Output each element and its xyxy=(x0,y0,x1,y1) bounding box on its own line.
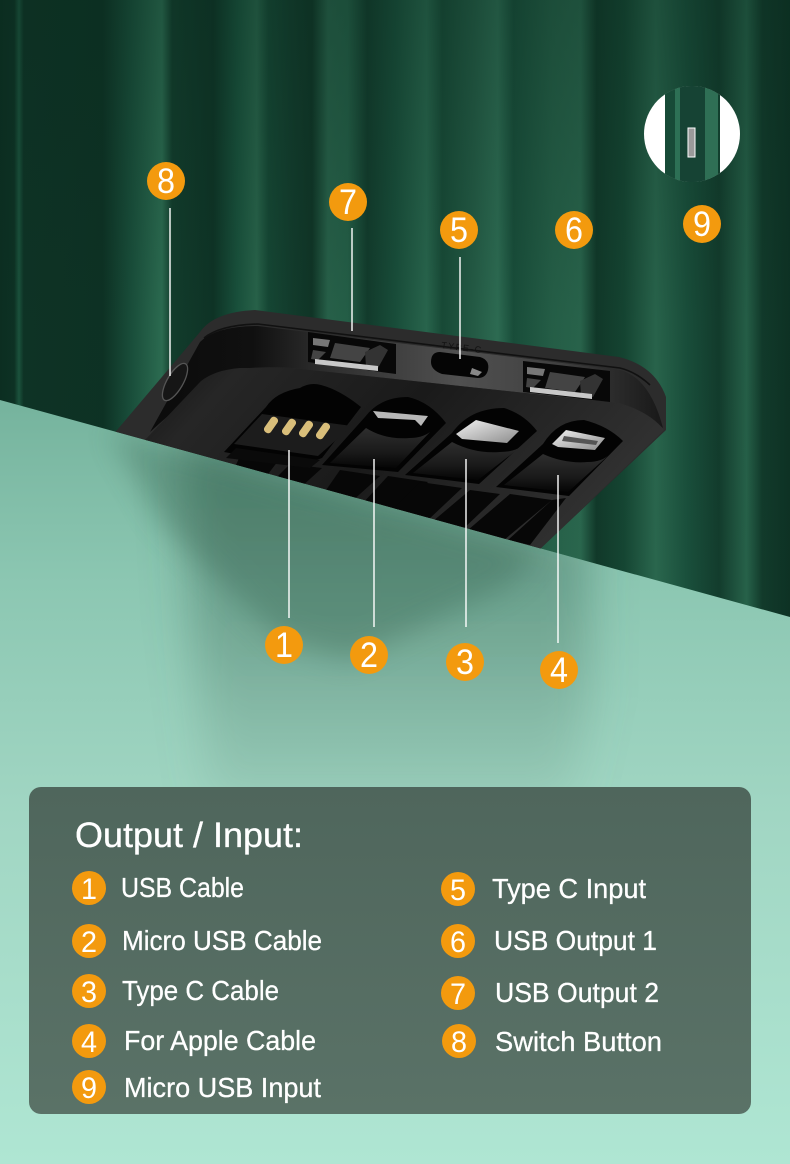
Type-C port (5) xyxy=(431,340,488,378)
port band xyxy=(150,326,663,432)
legend item 4: 4 xyxy=(81,1026,97,1059)
legend item 3 xyxy=(72,974,279,1009)
device body outline xyxy=(112,310,666,550)
badge 7 xyxy=(329,183,367,222)
legend item 2 xyxy=(72,924,322,959)
badge 3: 3 xyxy=(456,643,474,682)
legend item 8: Switch Button xyxy=(495,1026,662,1057)
badge 7: 7 xyxy=(339,183,357,222)
badge 8 xyxy=(147,162,185,201)
background: green curtain xyxy=(0,0,790,640)
slot: Micro USB cable xyxy=(322,397,446,472)
background: mint diagonal panel xyxy=(0,400,790,968)
badge 1 xyxy=(265,626,303,665)
legend item 9: Micro USB Input xyxy=(124,1072,321,1103)
switch button xyxy=(162,362,188,402)
top edge bevel xyxy=(204,324,650,385)
legend item 1 xyxy=(72,871,244,906)
legend item 7: 7 xyxy=(450,978,466,1011)
badge 5 xyxy=(440,211,478,250)
slot: Lightning cable xyxy=(496,420,623,496)
badge 4: 4 xyxy=(550,651,568,690)
badge 6 xyxy=(555,211,593,250)
legend item 7 xyxy=(441,976,659,1011)
heading: Output / Input: xyxy=(75,816,303,855)
legend item 5 xyxy=(441,872,646,907)
legend item 2: 2 xyxy=(81,926,97,959)
legend item 3: Type C Cable xyxy=(122,975,279,1006)
legend item 6: USB Output 1 xyxy=(494,925,657,956)
badge 3 xyxy=(446,643,484,682)
cable strips xyxy=(232,456,566,545)
badge 5: 5 xyxy=(450,211,468,250)
legend item 8: 8 xyxy=(451,1026,467,1059)
Type-C port (5): TYPE-C xyxy=(441,340,482,355)
power bank device xyxy=(112,310,666,550)
badge 6: 6 xyxy=(565,211,583,250)
badge 4 xyxy=(540,651,578,690)
legend item 1: 1 xyxy=(81,873,97,906)
legend item 6 xyxy=(441,924,657,959)
legend item 8 xyxy=(442,1024,662,1059)
legend item 4: For Apple Cable xyxy=(124,1025,316,1056)
USB output port 1 (6) xyxy=(523,361,610,402)
badge 9: 9 xyxy=(693,205,711,244)
inset: Micro USB input close-up xyxy=(644,84,740,184)
badge 1: 1 xyxy=(275,626,293,665)
legend item 6: 6 xyxy=(450,926,466,959)
badge 2: 2 xyxy=(360,636,378,675)
slot: Type-C cable xyxy=(405,408,537,484)
legend item 3: 3 xyxy=(81,976,97,1009)
legend item 2: Micro USB Cable xyxy=(122,925,322,956)
legend item 7: USB Output 2 xyxy=(495,977,659,1008)
legend item 4 xyxy=(72,1024,316,1059)
front face xyxy=(120,368,664,550)
badge 8: 8 xyxy=(157,162,175,201)
legend item 5: Type C Input xyxy=(492,873,646,904)
legend item 9: 9 xyxy=(81,1072,97,1105)
panel: output / input legend xyxy=(29,787,751,1114)
slot: USB cable xyxy=(224,384,361,468)
badge 2 xyxy=(350,636,388,675)
leader lines xyxy=(170,208,558,643)
USB output port 2 (7) xyxy=(308,332,396,374)
legend item 5: 5 xyxy=(450,874,466,907)
badge 9 xyxy=(683,205,721,244)
legend item 1: USB Cable xyxy=(121,872,244,903)
legend item 9 xyxy=(72,1070,321,1105)
